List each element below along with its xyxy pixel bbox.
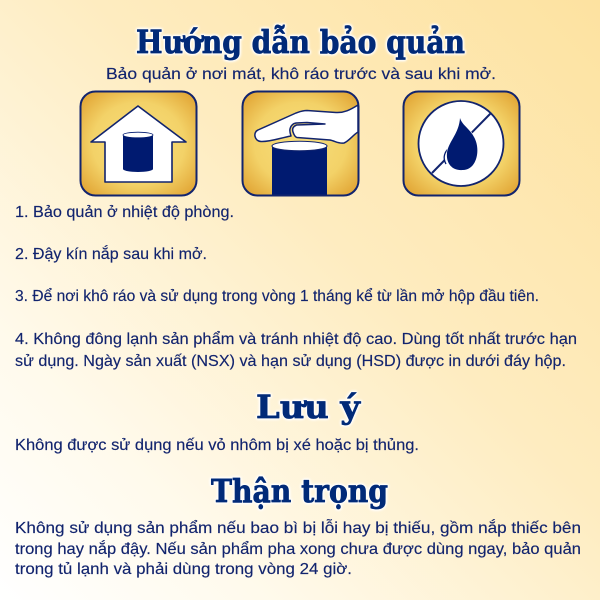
instruction 3: 3. Để nơi khô ráo và sử dụng trong vòng 1 tháng kể từ lần mở hộp đầu tiên. [15,287,539,305]
icon: no water drop [404,92,520,196]
heading: note: Lưu ý [256,388,361,426]
icon: hand closing can lid [242,92,358,196]
icon: house with can [80,92,196,196]
caution text: Không sử dụng sản phẩm nếu bao bì bị lỗi hay bị thiếu, gồm nắp thiếc bên [15,518,581,537]
note text: Không được sử dụng nếu vỏ nhôm bị xé hoặc bị thủng. [15,437,419,454]
title: Hướng dẫn bảo quản [136,23,465,61]
subtitle: Bảo quản ở nơi mát, khô ráo trước và sau khi mở. [106,66,496,83]
instruction 2: 2. Đậy kín nắp sau khi mở. [15,244,207,263]
caution text: trong tủ lạnh và phải dùng trong vòng 24 giờ. [15,561,352,578]
instruction 4 [15,330,577,370]
instruction 4: sử dụng. Ngày sản xuất (NSX) và hạn sử dụng (HSD) được in dưới đáy hộp. [15,353,566,370]
heading: caution: Thận trọng [211,472,388,510]
caution text [15,518,581,578]
caution text: trong hay nắp đậy. Nếu sản phẩm pha xong chưa được dùng ngay, bảo quản [15,539,581,558]
instruction 4: 4. Không đông lạnh sản phẩm và tránh nhiệt độ cao. Dùng tốt nhất trước hạn [15,330,577,348]
instruction 1: 1. Bảo quản ở nhiệt độ phòng. [15,204,234,221]
